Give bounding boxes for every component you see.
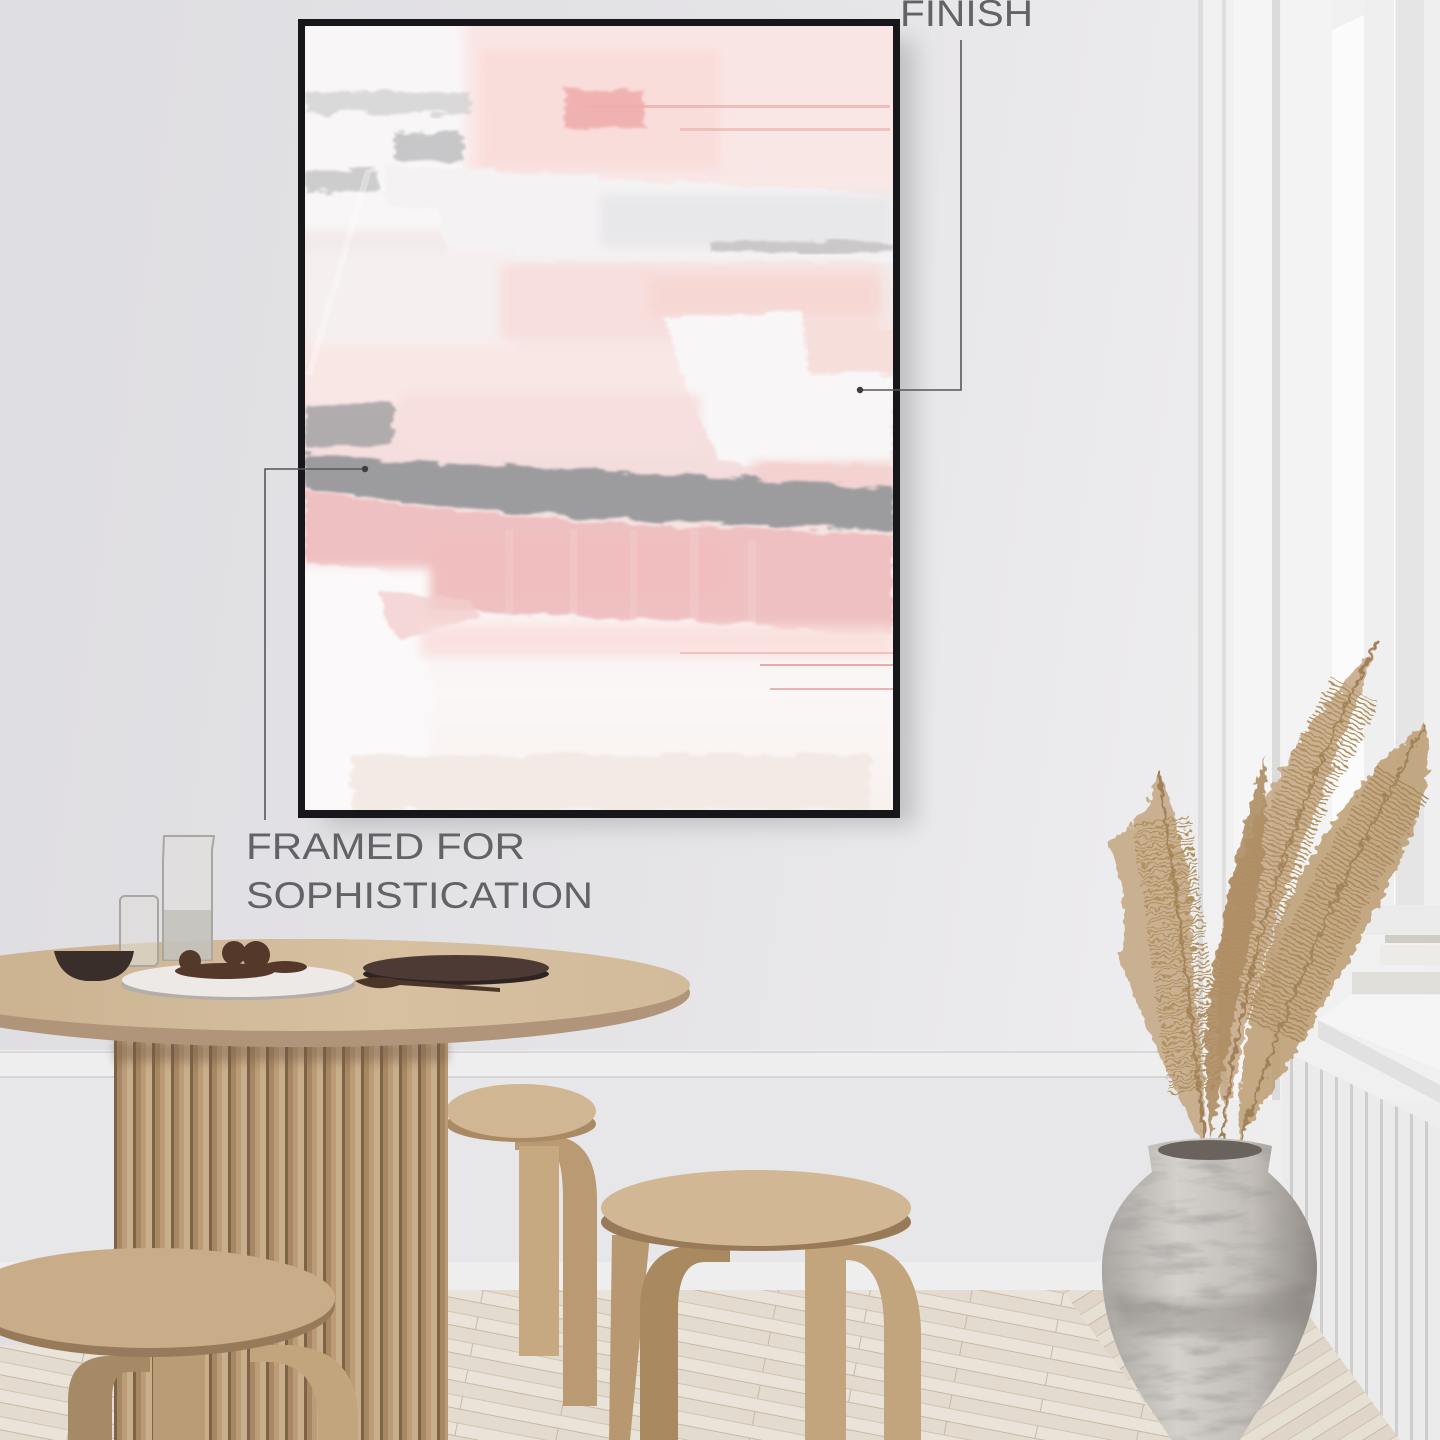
back stool: [446, 1084, 597, 1406]
chocolates: [175, 941, 307, 979]
ceramic vase: [1102, 1138, 1317, 1440]
pink band: [305, 490, 893, 635]
abstract paint strokes: [295, 16, 895, 813]
frame shadow: [325, 40, 915, 825]
plume: mid back: [1206, 755, 1266, 1140]
floor: [0, 1290, 1400, 1440]
callout label: framed for sophistication: SOPHISTICATION: [246, 875, 593, 916]
radiator: [1282, 1050, 1440, 1440]
drinking glass: [120, 896, 158, 966]
plume: far right: [1238, 722, 1429, 1150]
callout: framed for sophistication: [246, 466, 593, 916]
front right stool: [601, 1170, 921, 1440]
dark bowl: [54, 951, 134, 981]
black frame: [298, 19, 900, 818]
plume: tall centre: [1218, 638, 1380, 1140]
wainscot lower wall: [0, 1050, 1200, 1293]
plume: far left: [1108, 770, 1205, 1150]
dark plate: [363, 963, 549, 985]
spoon: [355, 977, 500, 992]
table top: [0, 939, 690, 1047]
pampas grass: [1108, 638, 1429, 1150]
marble tray: [121, 970, 355, 1000]
window sill and books: [1318, 935, 1440, 1103]
callout label: framed for sophistication: FRAMED FOR: [246, 826, 525, 867]
tableware: [54, 836, 549, 1000]
canvas: [305, 26, 893, 810]
fluted pedestal: [114, 1030, 448, 1440]
framed artwork: [295, 16, 915, 825]
grey band: [305, 452, 893, 530]
callout: finish: [857, 0, 1033, 393]
round table: [0, 939, 690, 1440]
front left stool: [0, 1248, 358, 1440]
window frame and trim: [1198, 0, 1440, 1100]
glass carafe: [163, 836, 214, 960]
